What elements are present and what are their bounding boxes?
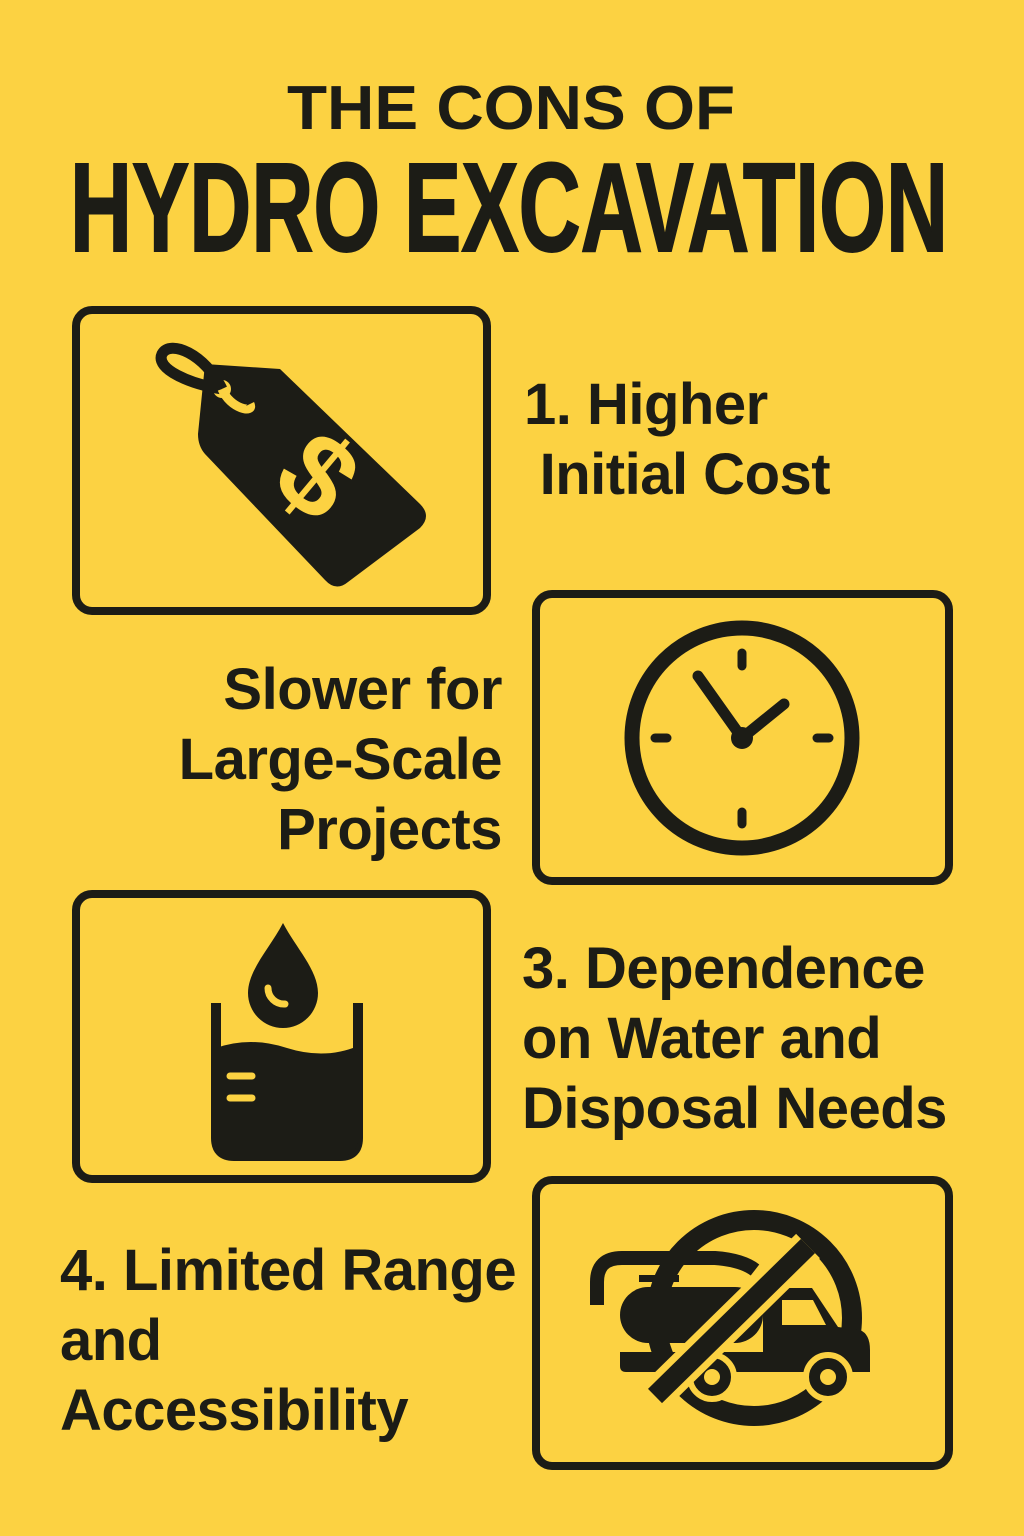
text: 4. limited range and accessibility: and	[60, 1308, 162, 1373]
icon: price tag: $	[252, 406, 383, 546]
text: 3. dependence on water and disposal needs: 3. Dependence	[522, 936, 925, 1001]
text: 4. limited range and accessibility: 4. Limited Range	[60, 1238, 516, 1303]
text: 4. limited range and accessibility: Accessibility	[60, 1378, 408, 1443]
title: the cons of: THE CONS OF	[287, 74, 735, 143]
text: 3. dependence on water and disposal needs: on Water and	[522, 1006, 881, 1071]
title	[70, 74, 948, 278]
text: 1. higher initial cost: 1. Higher	[524, 372, 768, 437]
panel: clock icon box	[532, 590, 953, 885]
text: slower for large-scale projects: Projects	[277, 797, 502, 862]
icon: water drop and beaker	[211, 923, 363, 1161]
icon: price tag	[156, 342, 426, 586]
text: 3. dependence on water and disposal needs: Disposal Needs	[522, 1076, 947, 1141]
text: slower for large-scale projects	[179, 657, 502, 862]
text: 4. limited range and accessibility	[60, 1238, 516, 1443]
text: slower for large-scale projects: Large-Scale	[179, 727, 502, 792]
icon: no truck	[590, 1210, 870, 1426]
panel: truck icon box	[532, 1176, 953, 1470]
text: 1. higher initial cost: Initial Cost	[540, 442, 830, 507]
text: 3. dependence on water and disposal needs	[522, 936, 947, 1141]
panel: price tag icon box	[72, 306, 491, 615]
panel: water beaker icon box	[72, 890, 491, 1183]
text: slower for large-scale projects: Slower for	[223, 657, 502, 722]
icon: clock	[624, 620, 860, 856]
text: 1. higher initial cost	[524, 372, 830, 507]
